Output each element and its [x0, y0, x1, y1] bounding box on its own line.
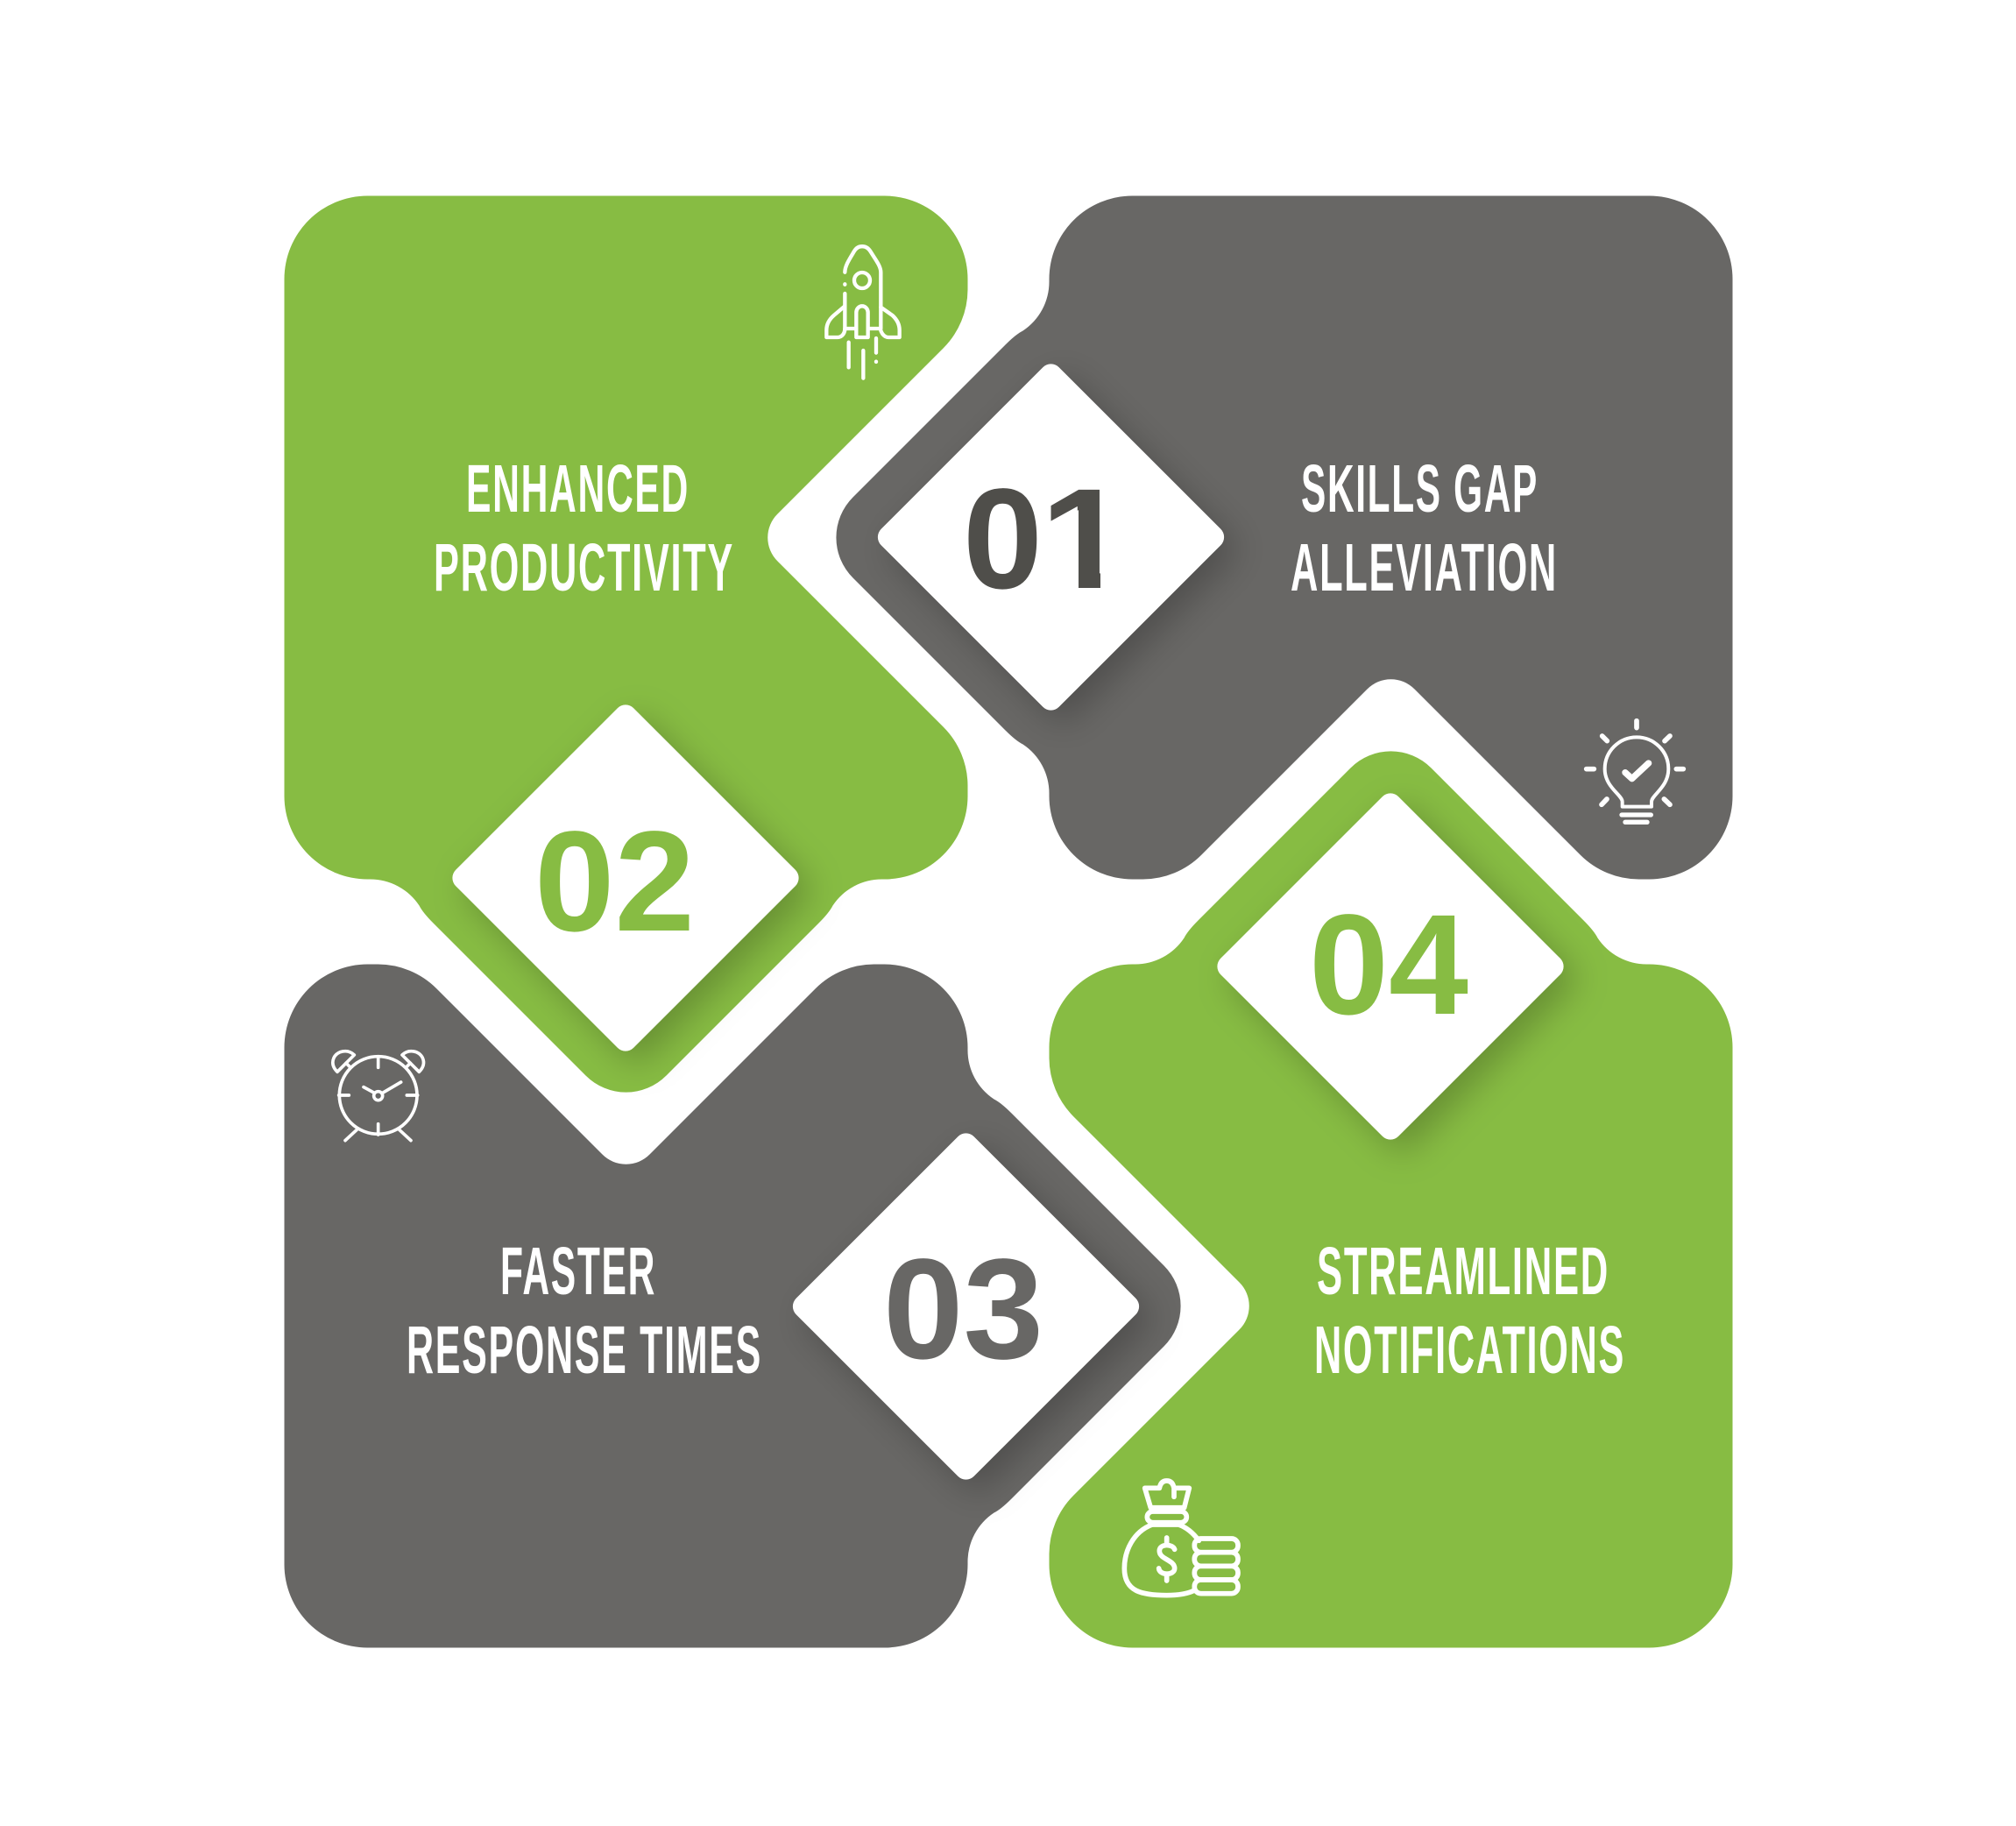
heading: skills gap alleviation: ALLEVIATION [1291, 530, 1558, 605]
panel: skills gap alleviation [836, 196, 1733, 880]
diamond shadow 03 [805, 1145, 1151, 1492]
heading: faster response times [407, 1234, 762, 1388]
diamond shadow 02 [464, 717, 811, 1064]
diamond shadow 04 [1229, 805, 1576, 1152]
panel: enhanced productivity [284, 196, 967, 1093]
heading: streamlined notifications: NOTIFICATIONS [1314, 1313, 1625, 1388]
heading: enhanced productivity: ENHANCED [466, 451, 690, 527]
diamond shadow 01 [890, 376, 1236, 723]
number 02: 02 [534, 801, 695, 961]
panel shape: gray top-right [836, 196, 1733, 880]
number 03: 03 [883, 1228, 1043, 1389]
number 04: 04 [1309, 884, 1468, 1044]
icon: light bulb with check [1587, 721, 1683, 822]
heading: faster response times: FASTER [500, 1234, 656, 1309]
number 01: 0 [963, 458, 1043, 619]
panel: streamlined notifications [1050, 751, 1733, 1647]
icon: money bag and coins [1124, 1481, 1238, 1596]
heading: skills gap alleviation [1291, 451, 1558, 605]
panel shape: green top-left [284, 196, 967, 1093]
heading: skills gap alleviation: SKILLS GAP [1301, 451, 1539, 527]
number 01 [963, 458, 1130, 619]
icon: alarm clock [333, 1051, 424, 1141]
heading: enhanced productivity [434, 451, 734, 605]
heading: streamlined notifications: STREAMLINED [1317, 1234, 1609, 1309]
panel: faster response times [284, 964, 1181, 1647]
panel shape: gray bottom-left [284, 964, 1181, 1647]
panel shape: green bottom-right [1050, 751, 1733, 1647]
icon: rocket [826, 246, 900, 379]
diamond 04 [1217, 793, 1564, 1140]
diamond 01 [878, 364, 1224, 711]
heading: streamlined notifications [1314, 1234, 1625, 1388]
heading: faster response times: RESPONSE TIMES [407, 1313, 762, 1388]
diamond 03 [793, 1133, 1139, 1480]
heading: enhanced productivity: PRODUCTIVITY [434, 530, 734, 605]
number 01: 1 [1040, 458, 1129, 619]
diamond 02 [452, 704, 799, 1051]
